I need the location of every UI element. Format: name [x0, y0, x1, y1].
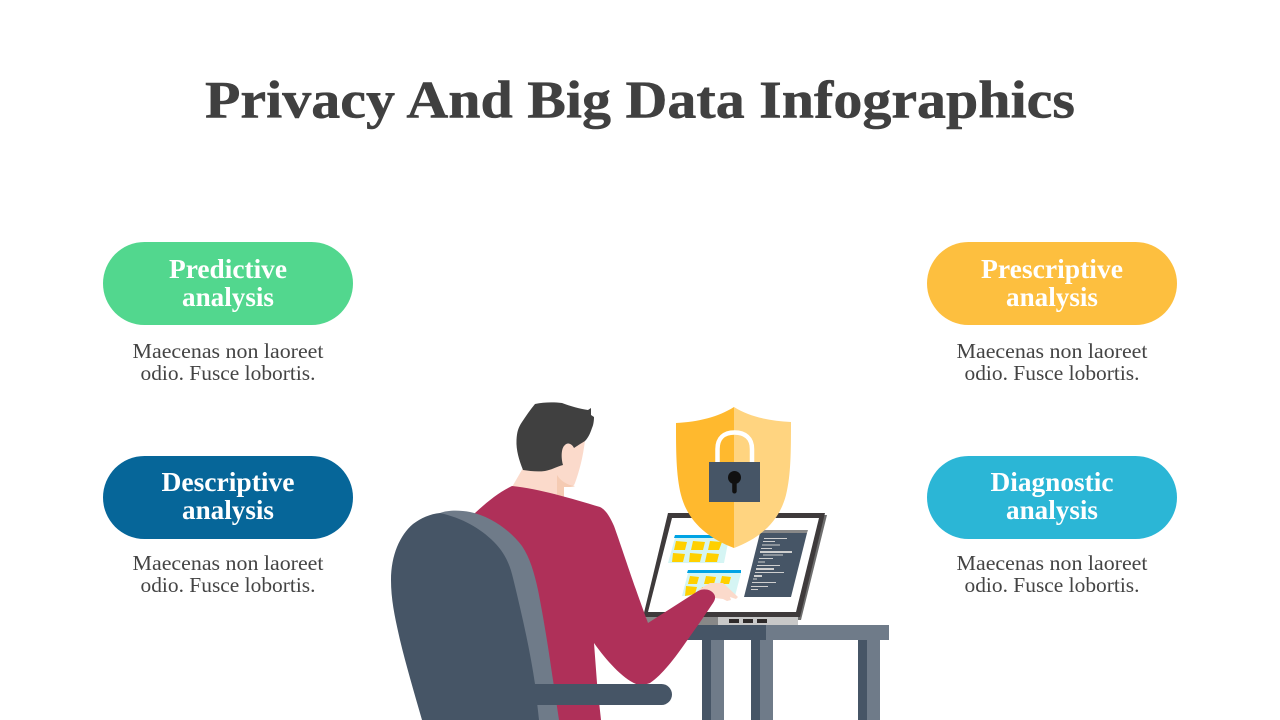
- folder window 1: [668, 535, 729, 563]
- folder window 2: [682, 570, 741, 596]
- icon: security shield with padlock: [676, 407, 791, 548]
- panel: descriptive analysis: [103, 456, 353, 597]
- pill: predictive: Predictive: [169, 254, 287, 284]
- hand: [698, 583, 738, 601]
- illustration: person at laptop: [391, 402, 889, 720]
- panel: diagnostic analysis: [927, 456, 1177, 597]
- chair: [391, 511, 672, 720]
- panel: predictive analysis: [103, 242, 353, 385]
- pill: descriptive: Descriptive: [162, 467, 295, 497]
- text: prescriptive description: [956, 339, 1148, 385]
- desk: [646, 625, 889, 720]
- text: predictive description: odio. Fusce lobortis.: [140, 361, 316, 385]
- text: descriptive description: odio. Fusce lobortis.: [140, 573, 316, 597]
- text: diagnostic description: Maecenas non laoreet: [956, 551, 1148, 575]
- pill: diagnostic: [927, 456, 1177, 539]
- laptop: [643, 513, 827, 625]
- text: predictive description: [132, 339, 324, 385]
- pill: descriptive: [103, 456, 353, 539]
- sweater: [440, 486, 715, 720]
- pill: diagnostic: analysis: [1006, 495, 1098, 525]
- text: predictive description: Maecenas non laoreet: [132, 339, 324, 363]
- text: prescriptive description: odio. Fusce lobortis.: [964, 361, 1140, 385]
- text: diagnostic description: odio. Fusce lobortis.: [964, 573, 1140, 597]
- pill: diagnostic: Diagnostic: [990, 467, 1114, 497]
- pill: prescriptive: [927, 242, 1177, 325]
- panel: prescriptive analysis: [927, 242, 1177, 385]
- pill: descriptive: analysis: [182, 495, 274, 525]
- code window: [744, 530, 808, 597]
- pill: predictive: analysis: [182, 282, 274, 312]
- neck and face: [512, 440, 585, 498]
- text: prescriptive description: Maecenas non laoreet: [956, 339, 1148, 363]
- pill: predictive: [103, 242, 353, 325]
- icon: padlock: [709, 432, 760, 502]
- text: descriptive description: Maecenas non laoreet: [132, 551, 324, 575]
- text: descriptive description: [132, 551, 324, 597]
- title: Privacy And Big Data Infographics: [205, 72, 1075, 130]
- pill: prescriptive: analysis: [1006, 282, 1098, 312]
- text: diagnostic description: [956, 551, 1148, 597]
- hair: [516, 402, 594, 471]
- person: [391, 402, 738, 720]
- pill: prescriptive: Prescriptive: [981, 254, 1123, 284]
